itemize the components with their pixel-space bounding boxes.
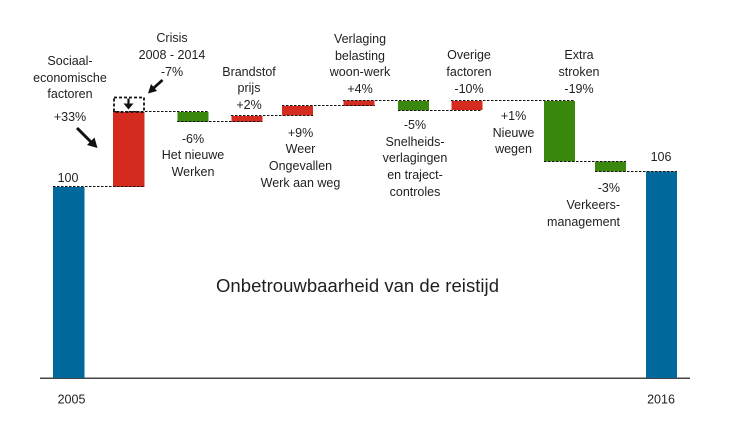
bar: verlaging belasting [344,100,374,106]
bar: 2016 [646,172,677,378]
bar: verkeersmanagement [595,162,626,172]
label: crisis: Crisis [156,31,188,45]
label: sociaal-economische factoren: factoren [47,87,93,101]
label: weer ongevallen werk aan weg: +9% [288,126,313,140]
bar: brandstof prijs [232,116,262,122]
label: het nieuwe werken: Werken [172,165,214,179]
year: 2016: 2016 [647,392,675,406]
label: weer ongevallen werk aan weg: Ongevallen [269,159,332,173]
label: nieuwe wegen: Nieuwe [493,126,534,140]
label: verkeersmanagement: Verkeers- [566,198,620,212]
chart title: Onbetrouwbaarheid van de reistijd [216,275,499,296]
label: brandstof prijs: prijs [238,81,260,95]
bar: sociaal-economische factoren [113,112,144,187]
label: verlaging belasting: Verlaging [334,32,386,46]
bar: extra stroken [544,101,575,162]
label: het nieuwe werken: -6% [182,132,204,146]
value: 106: 106 [651,150,671,164]
label: brandstof prijs: Brandstof [222,65,276,79]
label: weer ongevallen werk aan weg: Weer [286,142,315,156]
label: crisis: 2008 - 2014 [139,48,205,62]
label: verlaging belasting: +4% [347,82,373,96]
connector lines [53,100,677,186]
label: snelheidsverlagingen: Snelheids- [385,135,445,149]
label: sociaal-economische factoren: +33% [54,110,86,124]
label: overige factoren: factoren [446,65,492,79]
bar: weer ongevallen [282,106,313,116]
axis line [40,378,690,379]
label: crisis: -7% [161,65,183,79]
label: verlaging belasting: woon-werk [329,65,391,79]
bar: crisis dashed box [114,98,144,112]
label: het nieuwe werken: Het nieuwe [162,148,224,162]
label: overige factoren: Overige [447,48,491,62]
label: nieuwe wegen: +1% [501,109,526,123]
label: verkeersmanagement: management [547,215,621,229]
label: weer ongevallen werk aan weg: Werk aan weg [261,176,340,190]
label: overige factoren: -10% [454,82,484,96]
arrow: crisis [148,80,162,94]
year: 2005: 2005 [58,392,85,406]
label: extra stroken: -19% [564,82,594,96]
label: nieuwe wegen: wegen [494,142,532,156]
label: snelheidsverlagingen: -5% [404,118,426,132]
bar: snelheidsverlagingen [398,101,429,110]
value: 100: 100 [58,171,78,185]
bar: het nieuwe werken [178,112,208,122]
arrow: crisis down [124,98,134,110]
label: sociaal-economische factoren: Sociaal- [47,54,93,68]
label: sociaal-economische factoren: economische [33,71,107,85]
label: extra stroken: stroken [558,65,600,79]
label: extra stroken: Extra [564,48,594,62]
bar: overige factoren [452,101,482,110]
arrow: sociaal-economische [77,128,98,148]
label: brandstof prijs: +2% [236,98,262,112]
bar: 2005 [53,187,84,378]
label: verlaging belasting: belasting [335,49,385,63]
label: snelheidsverlagingen: en traject- [387,168,443,182]
label: snelheidsverlagingen: verlagingen [383,151,447,165]
label: snelheidsverlagingen: controles [390,185,440,199]
label: verkeersmanagement: -3% [598,181,620,195]
